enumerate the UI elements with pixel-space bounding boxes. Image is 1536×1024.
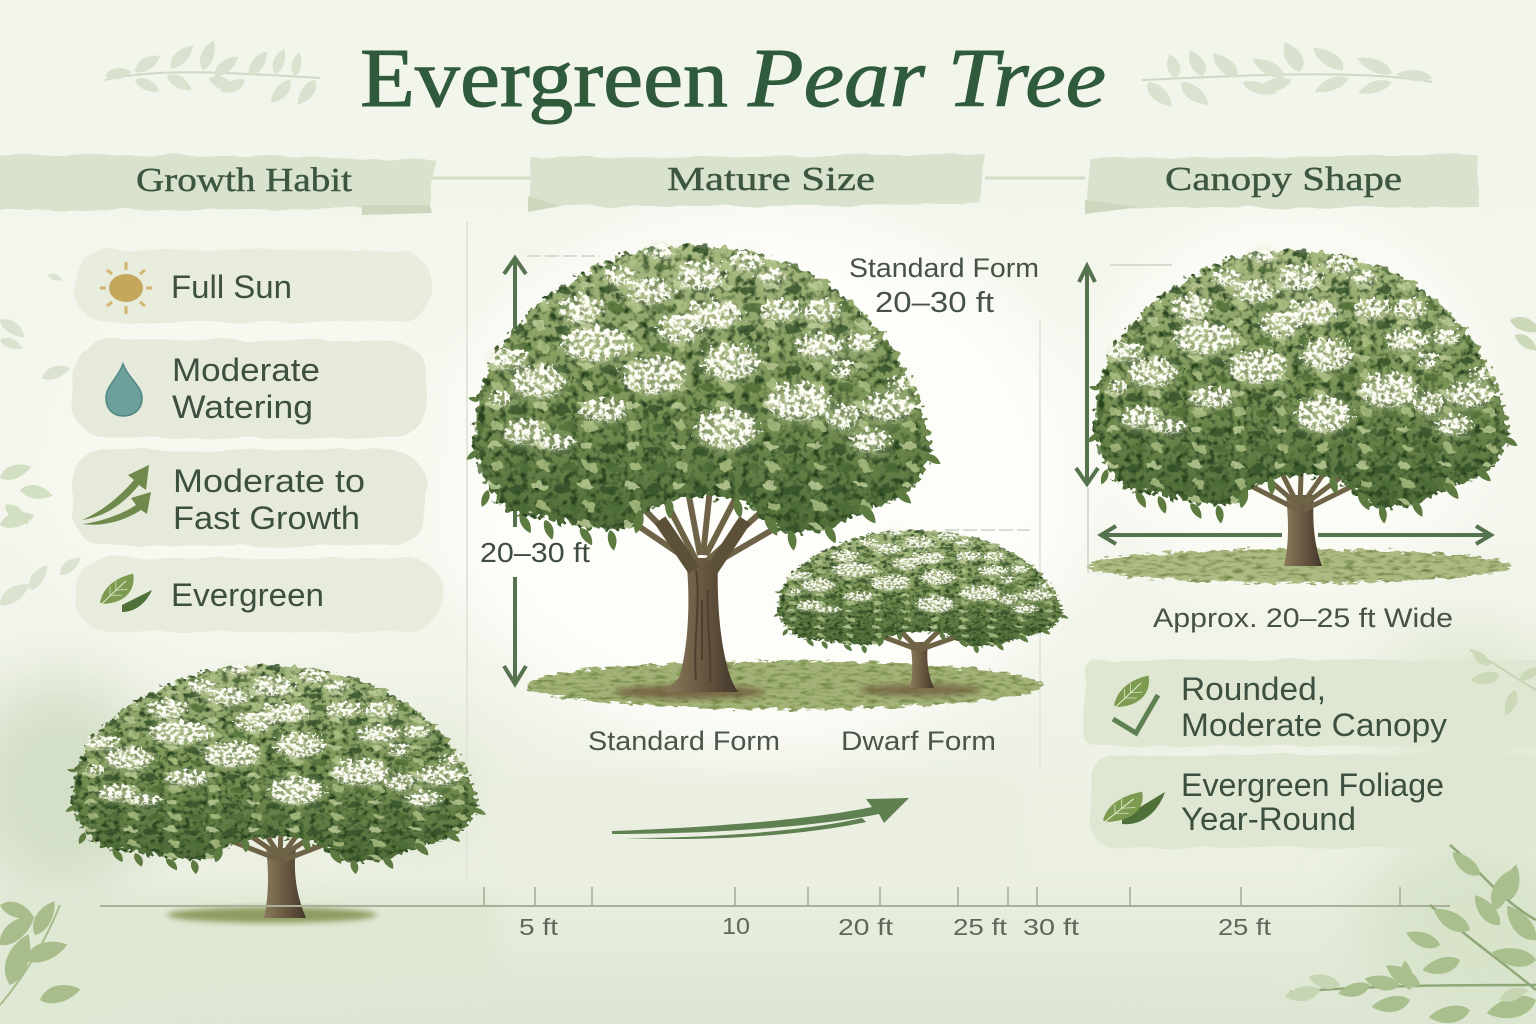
label: Moderate to Fast Growth	[173, 463, 365, 536]
icon: water drop	[106, 364, 142, 416]
canopy: left tree	[64, 665, 488, 875]
trunk: right tree	[1210, 445, 1395, 566]
decoration: bottom-left foliage	[0, 897, 82, 1007]
title: Pear Tree	[747, 32, 1106, 125]
chart: scale axis	[100, 887, 1450, 940]
chart: scale axis: 25 ft	[1218, 914, 1272, 940]
panel: canopy attributes	[1085, 660, 1536, 848]
title	[360, 32, 1106, 125]
connector line: ribbons	[430, 176, 1085, 180]
decoration: right edge sprigs	[1468, 313, 1536, 717]
label: Full Sun: Full Sun	[171, 269, 292, 305]
title: Evergreen	[360, 32, 728, 125]
label: rounded moderate canopy	[1181, 671, 1447, 743]
ground: grass mound	[527, 661, 1043, 709]
heading: Growth Habit	[0, 154, 436, 215]
trunk: left tree	[190, 805, 375, 918]
divider: left column	[466, 222, 468, 880]
soft watercolor washes	[0, 210, 1536, 1024]
ground: left tree	[167, 907, 377, 923]
icon: leaves	[1103, 792, 1165, 824]
dimension: canopy height arrow	[1076, 266, 1098, 484]
heading: Mature Size: Mature Size	[667, 161, 875, 198]
label: canopy width: Approx. 20–25 ft Wide	[1153, 603, 1453, 633]
label: Moderate Watering: Watering	[172, 389, 313, 425]
dimension: dwarf top marker	[945, 529, 1030, 531]
trunk: dwarf tree	[870, 625, 970, 688]
pill: evergreen	[76, 558, 442, 632]
dimension: height arrow	[504, 258, 526, 684]
decoration: right title sprig	[1141, 40, 1433, 110]
icon: growth arrows	[82, 465, 151, 525]
chart: mature size comparison	[465, 246, 1070, 756]
label: rounded moderate canopy: Moderate Canopy	[1181, 707, 1447, 743]
label: evergreen foliage year-round: Evergreen Foliage	[1181, 767, 1444, 803]
label: rounded moderate canopy: Rounded,	[1181, 671, 1326, 707]
chart: scale axis: 5 ft	[519, 914, 559, 940]
pill: growth rate	[72, 450, 426, 546]
chart: scale axis: 30 ft	[1023, 914, 1080, 940]
icon: leaf	[100, 574, 152, 612]
label: evergreen foliage year-round: Year-Round	[1181, 801, 1356, 837]
label: Evergreen: Evergreen	[171, 577, 324, 613]
heading: Mature Size	[528, 153, 985, 212]
label: Moderate Watering: Moderate	[172, 352, 320, 388]
chart: scale axis: 25 ft	[953, 914, 1008, 940]
canopy: standard tree	[465, 246, 943, 551]
arrow: growth trend	[612, 798, 909, 839]
ground: right tree	[1088, 549, 1512, 583]
label: Moderate Watering	[172, 352, 320, 425]
pill: full sun	[74, 250, 432, 322]
heading: Canopy Shape: Canopy Shape	[1165, 161, 1402, 198]
decoration: left edge sprigs	[0, 272, 84, 610]
card: rounded canopy	[1085, 660, 1536, 746]
chart: scale axis: 10	[722, 913, 750, 939]
panel: growth arrow band	[495, 775, 1025, 880]
tree: growth habit	[64, 665, 488, 923]
icon: sun	[100, 262, 152, 314]
panel: growth habit attributes	[72, 250, 442, 632]
heading: Canopy Shape	[1085, 154, 1480, 214]
decoration: bottom-right foliage	[1283, 845, 1536, 1024]
label: standard form: Standard Form	[588, 726, 780, 756]
label: height: 20–30 ft	[480, 537, 590, 568]
chart: scale axis: 20 ft	[838, 914, 894, 940]
label: standard form callout: Standard Form	[849, 253, 1039, 283]
icon: leaf check	[1113, 676, 1158, 733]
dimension: guide lines	[1088, 265, 1172, 573]
label: Moderate to Fast Growth: Moderate to	[173, 463, 365, 499]
decoration: left title sprig	[104, 38, 321, 108]
dimension: standard top marker	[527, 255, 600, 257]
label: dwarf form: Dwarf Form	[841, 726, 996, 756]
label: Moderate to Fast Growth: Fast Growth	[173, 500, 360, 536]
heading: Growth Habit: Growth Habit	[136, 162, 353, 199]
canopy: right tree	[1086, 250, 1519, 524]
trunk: standard tree	[600, 470, 815, 692]
pill: moderate watering	[72, 340, 426, 438]
divider: right column	[1039, 320, 1041, 770]
label: standard form callout	[849, 253, 1039, 319]
label: evergreen foliage year-round	[1181, 767, 1444, 837]
chart: canopy shape	[1076, 250, 1519, 633]
dimension: canopy width arrows	[1101, 526, 1491, 544]
canopy: dwarf tree	[772, 530, 1070, 654]
card: evergreen foliage	[1090, 755, 1536, 848]
label: standard form callout: 20–30 ft	[875, 287, 994, 319]
